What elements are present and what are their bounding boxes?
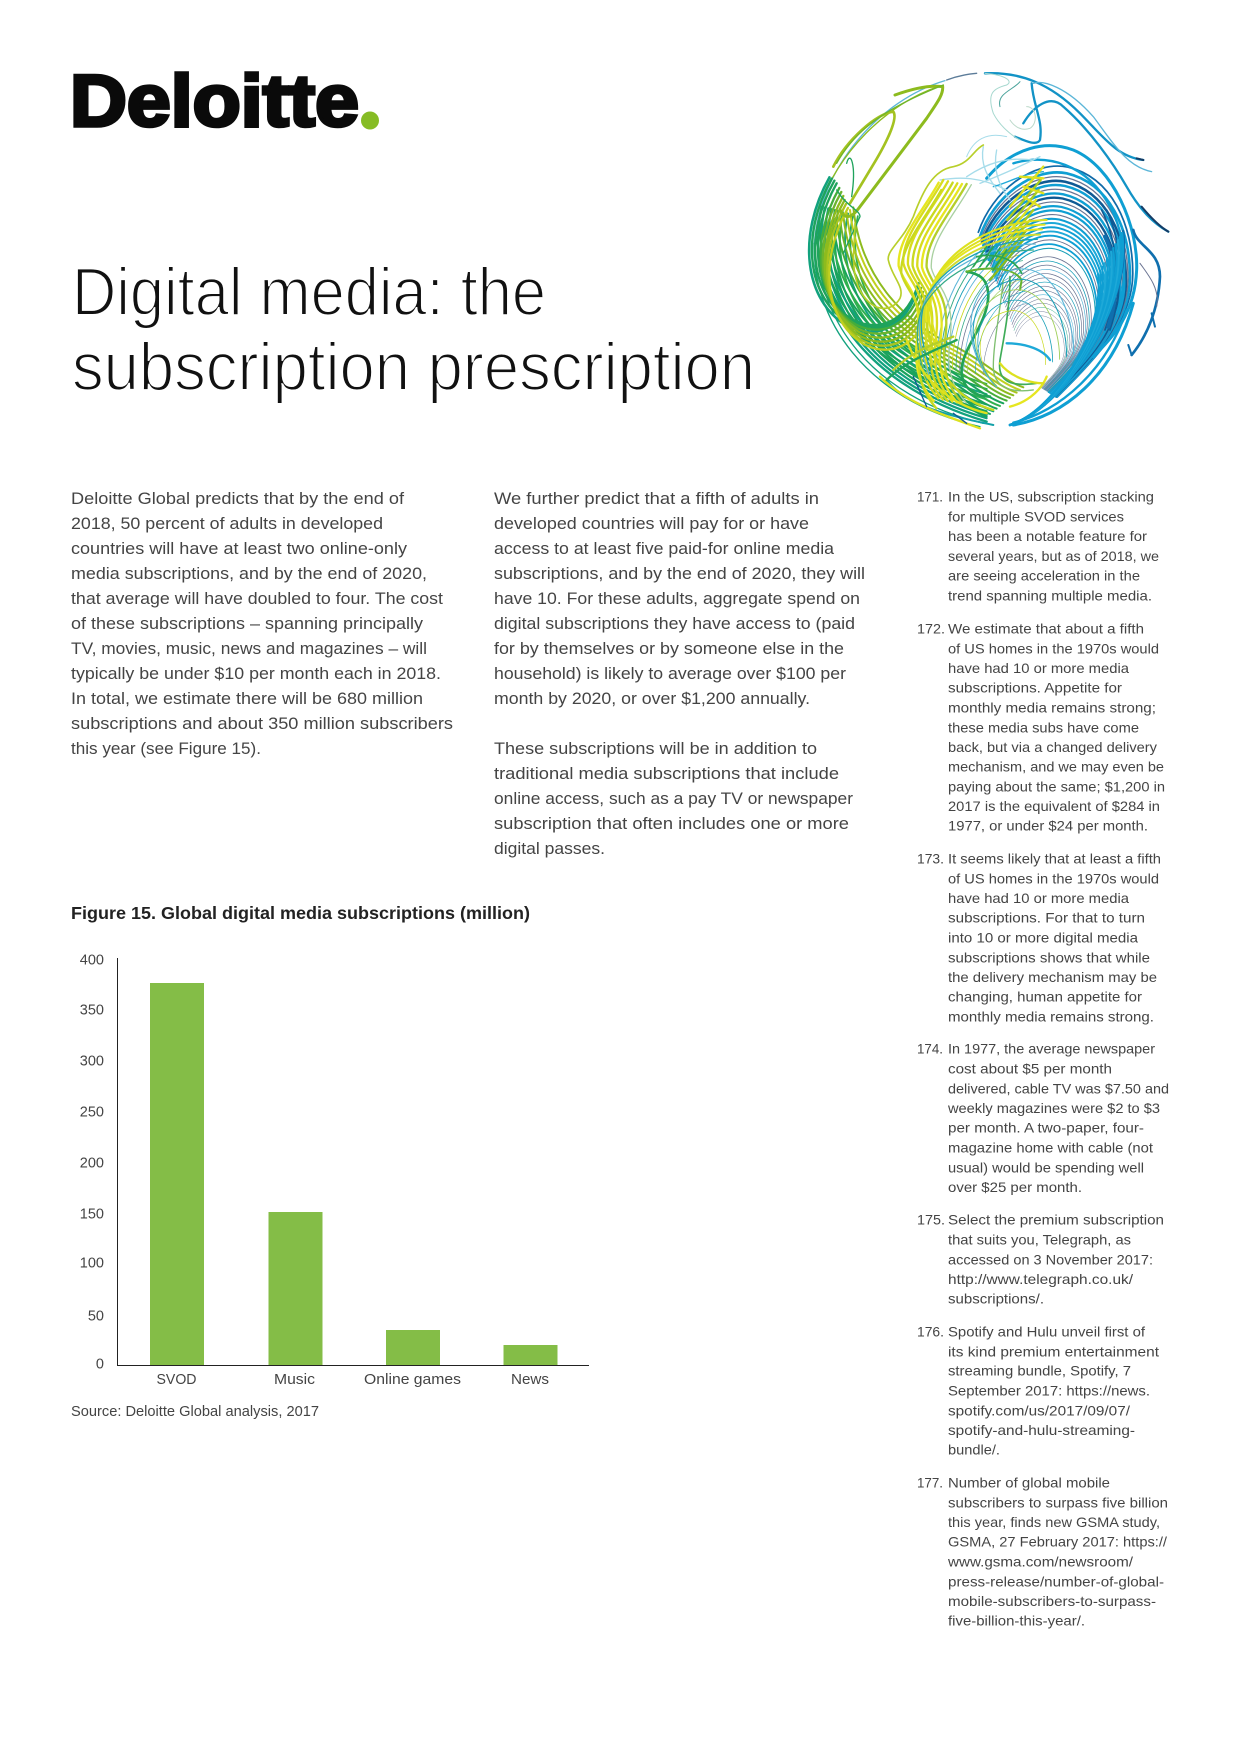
endnote 171: In the US, subscription stacking xyxy=(948,488,1154,504)
endnote 172: of US homes in the 1970s would xyxy=(948,640,1159,656)
blue domes xyxy=(978,166,1133,397)
endnote 171: 171. xyxy=(917,488,943,504)
middle text column: for by themselves or by someone else in the xyxy=(494,639,844,658)
middle text column: subscriptions, and by the end of 2020, they will xyxy=(494,564,865,583)
endnote 174: 174. xyxy=(917,1040,943,1056)
inner concentric arcs xyxy=(1001,257,1091,391)
figure heading: Figure 15. Global digital media subscriptions (million) xyxy=(71,903,530,923)
left text column: subscriptions and about 350 million subscribers xyxy=(71,714,453,733)
endnote 177 xyxy=(917,1474,1168,1628)
endnote 171: are seeing acceleration in the xyxy=(948,568,1140,584)
endnote 177: www.gsma.com/newsroom/ xyxy=(947,1554,1133,1570)
endnote 171 xyxy=(917,488,1159,604)
left text column: that average will have doubled to four. The cost xyxy=(71,589,443,608)
icon: globe of flowing lines xyxy=(809,73,1168,428)
endnote 176: spotify-and-hulu-streaming- xyxy=(948,1422,1135,1438)
logo: Deloitte: Deloitte xyxy=(70,61,359,142)
endnote 173: into 10 or more digital media xyxy=(948,930,1138,946)
endnote 173: It seems likely that at least a fifth xyxy=(948,850,1161,866)
endnote 176: its kind premium entertainment xyxy=(948,1344,1159,1360)
left text column: typically be under $10 per month each in 2018. xyxy=(71,664,441,683)
left text column: Deloitte Global predicts that by the end of xyxy=(71,489,404,508)
y axis labels: 250 xyxy=(80,1104,104,1120)
left-hand thin arcs xyxy=(937,230,1026,375)
endnote 172: back, but via a changed delivery xyxy=(948,739,1157,755)
middle text column: developed countries will pay for or have xyxy=(494,514,809,533)
endnote 176: spotify.com/us/2017/09/07/ xyxy=(948,1402,1130,1418)
left text column: media subscriptions, and by the end of 2020, xyxy=(71,564,427,583)
endnote 174: delivered, cable TV was $7.50 and xyxy=(948,1080,1169,1096)
endnote 173: monthly media remains strong. xyxy=(948,1008,1154,1024)
endnote 174: weekly magazines were $2 to $3 xyxy=(947,1100,1160,1116)
endnote 173 xyxy=(917,850,1161,1024)
yellow families xyxy=(899,180,971,408)
olive loops xyxy=(833,85,943,253)
endnote 173: subscriptions. For that to turn xyxy=(948,910,1145,926)
central green strands xyxy=(962,247,1037,397)
endnote 177: five-billion-this-year/. xyxy=(948,1612,1085,1628)
endnote 172: 1977, or under $24 per month. xyxy=(948,818,1148,834)
endnote 172: subscriptions. Appetite for xyxy=(948,680,1122,696)
y axis labels: 400 xyxy=(80,952,104,968)
bottom knot xyxy=(887,323,1050,423)
x axis labels xyxy=(156,1372,549,1388)
endnote 175: http://www.telegraph.co.uk/ xyxy=(948,1271,1133,1287)
green U family xyxy=(809,177,930,350)
endnote 174: In 1977, the average newspaper xyxy=(948,1040,1155,1056)
endnote 177: subscribers to surpass five billion xyxy=(948,1494,1168,1510)
y axis labels: 150 xyxy=(80,1206,104,1222)
endnote 177: GSMA, 27 February 2017: https:// xyxy=(948,1534,1167,1550)
y axis labels: 50 xyxy=(88,1308,104,1324)
left text column: In total, we estimate there will be 680 million xyxy=(71,689,423,708)
pale cross lines xyxy=(940,147,1043,200)
endnote 175: accessed on 3 November 2017: xyxy=(948,1252,1153,1268)
middle text column: household) is likely to average over $100 per xyxy=(494,664,846,683)
middle text column: We further predict that a fifth of adults in xyxy=(494,489,819,508)
endnote 172: paying about the same; $1,200 in xyxy=(948,778,1165,794)
y axis labels: 0 xyxy=(96,1356,104,1372)
lower left fan xyxy=(817,207,1023,428)
middle text column: have 10. For these adults, aggregate spend on xyxy=(494,589,860,608)
left text column: of these subscriptions – spanning principally xyxy=(71,614,424,633)
middle text column: digital passes. xyxy=(494,839,605,858)
endnote 177: 177. xyxy=(917,1474,943,1490)
left text column: TV, movies, music, news and magazines – will xyxy=(71,639,427,658)
endnote 175: 175. xyxy=(917,1212,945,1228)
endnote 174: cost about $5 per month xyxy=(948,1060,1112,1076)
endnote 176: streaming bundle, Spotify, 7 xyxy=(948,1362,1131,1378)
endnote 175: subscriptions/. xyxy=(948,1290,1044,1306)
y axis labels: 100 xyxy=(80,1256,104,1272)
endnote 173: subscriptions shows that while xyxy=(948,950,1150,966)
endnote 176: bundle/. xyxy=(948,1442,1000,1458)
middle text column: month by 2020, or over $1,200 annually. xyxy=(494,689,810,708)
endnote 173: the delivery mechanism may be xyxy=(948,969,1157,985)
endnote 172: mechanism, and we may even be xyxy=(948,758,1164,774)
endnote 174: per month. A two-paper, four- xyxy=(948,1120,1144,1136)
bar chart: global digital media subscriptions xyxy=(80,952,589,1388)
source note: Source: Deloitte Global analysis, 2017 xyxy=(71,1403,319,1420)
endnote 172 xyxy=(917,620,1165,834)
endnote 175: Select the premium subscription xyxy=(948,1212,1164,1228)
endnote 177: Number of global mobile xyxy=(948,1474,1110,1490)
x axis labels: SVOD xyxy=(156,1372,196,1388)
top right tails xyxy=(947,73,1168,355)
endnote 172: 172. xyxy=(917,620,945,636)
endnote 175 xyxy=(917,1212,1164,1306)
endnote 172: have had 10 or more media xyxy=(948,660,1129,676)
endnote 173: have had 10 or more media xyxy=(948,890,1129,906)
endnote 171: several years, but as of 2018, we xyxy=(948,548,1159,564)
title: Digital media: the xyxy=(72,254,546,330)
axes xyxy=(118,958,589,1366)
endnote 172: these media subs have come xyxy=(948,720,1139,736)
middle text column: These subscriptions will be in addition to xyxy=(494,739,817,758)
thin yellow line xyxy=(854,145,983,308)
y axis labels: 350 xyxy=(80,1002,104,1018)
middle text column: subscription that often includes one or more xyxy=(494,814,849,833)
title: subscription prescription xyxy=(72,329,755,405)
outer rim arcs xyxy=(814,81,983,427)
endnote 177: press-release/number-of-global- xyxy=(948,1574,1164,1590)
left text column: countries will have at least two online-only xyxy=(71,539,408,558)
outer blue arcs xyxy=(987,146,1137,357)
endnote 171: trend spanning multiple media. xyxy=(948,588,1152,604)
y axis labels xyxy=(80,952,104,1372)
endnote 176 xyxy=(917,1324,1159,1458)
rim bands xyxy=(818,207,987,422)
endnote 177: this year, finds new GSMA study, xyxy=(948,1514,1160,1530)
endnote 176: September 2017: https://news. xyxy=(948,1382,1150,1398)
middle text column xyxy=(494,489,865,858)
endnote 171: for multiple SVOD services xyxy=(948,508,1124,524)
endnote 174: over $25 per month. xyxy=(948,1179,1082,1195)
endnote 172: monthly media remains strong; xyxy=(948,700,1156,716)
y axis labels: 300 xyxy=(80,1054,104,1070)
middle text column: traditional media subscriptions that include xyxy=(494,764,839,783)
endnote 176: Spotify and Hulu unveil first of xyxy=(948,1324,1145,1340)
endnote 175: that suits you, Telegraph, as xyxy=(948,1232,1131,1248)
left text column: 2018, 50 percent of adults in developed xyxy=(71,514,383,533)
x axis labels: Online games xyxy=(364,1372,461,1388)
endnote 177: mobile-subscribers-to-surpass- xyxy=(948,1593,1156,1609)
left text column: this year (see Figure 15). xyxy=(71,739,261,758)
endnote 172: We estimate that about a fifth xyxy=(948,620,1144,636)
endnote 173: of US homes in the 1970s would xyxy=(948,870,1159,886)
endnote 172: 2017 is the equivalent of $284 in xyxy=(948,798,1160,814)
endnote 174 xyxy=(917,1040,1169,1195)
endnote 174: magazine home with cable (not xyxy=(948,1140,1153,1156)
endnote 171: has been a notable feature for xyxy=(948,528,1147,544)
bottom right wedge xyxy=(1010,231,1133,425)
bars xyxy=(150,983,558,1365)
endnote 176: 176. xyxy=(917,1324,944,1340)
lime bars xyxy=(990,167,1043,280)
middle text column: access to at least five paid-for online media xyxy=(494,539,835,558)
endnote 174: usual) would be spending well xyxy=(948,1160,1144,1176)
middle text column: digital subscriptions they have access to (paid xyxy=(494,614,855,633)
x axis labels: News xyxy=(511,1372,549,1388)
y axis labels: 200 xyxy=(80,1156,104,1172)
x axis labels: Music xyxy=(274,1372,315,1388)
inner lower arcs xyxy=(971,269,1074,387)
title xyxy=(72,254,755,405)
endnote 173: 173. xyxy=(917,850,944,866)
endnote 173: changing, human appetite for xyxy=(948,988,1142,1004)
left text column xyxy=(71,489,453,758)
middle text column: online access, such as a pay TV or newspaper xyxy=(494,789,853,808)
